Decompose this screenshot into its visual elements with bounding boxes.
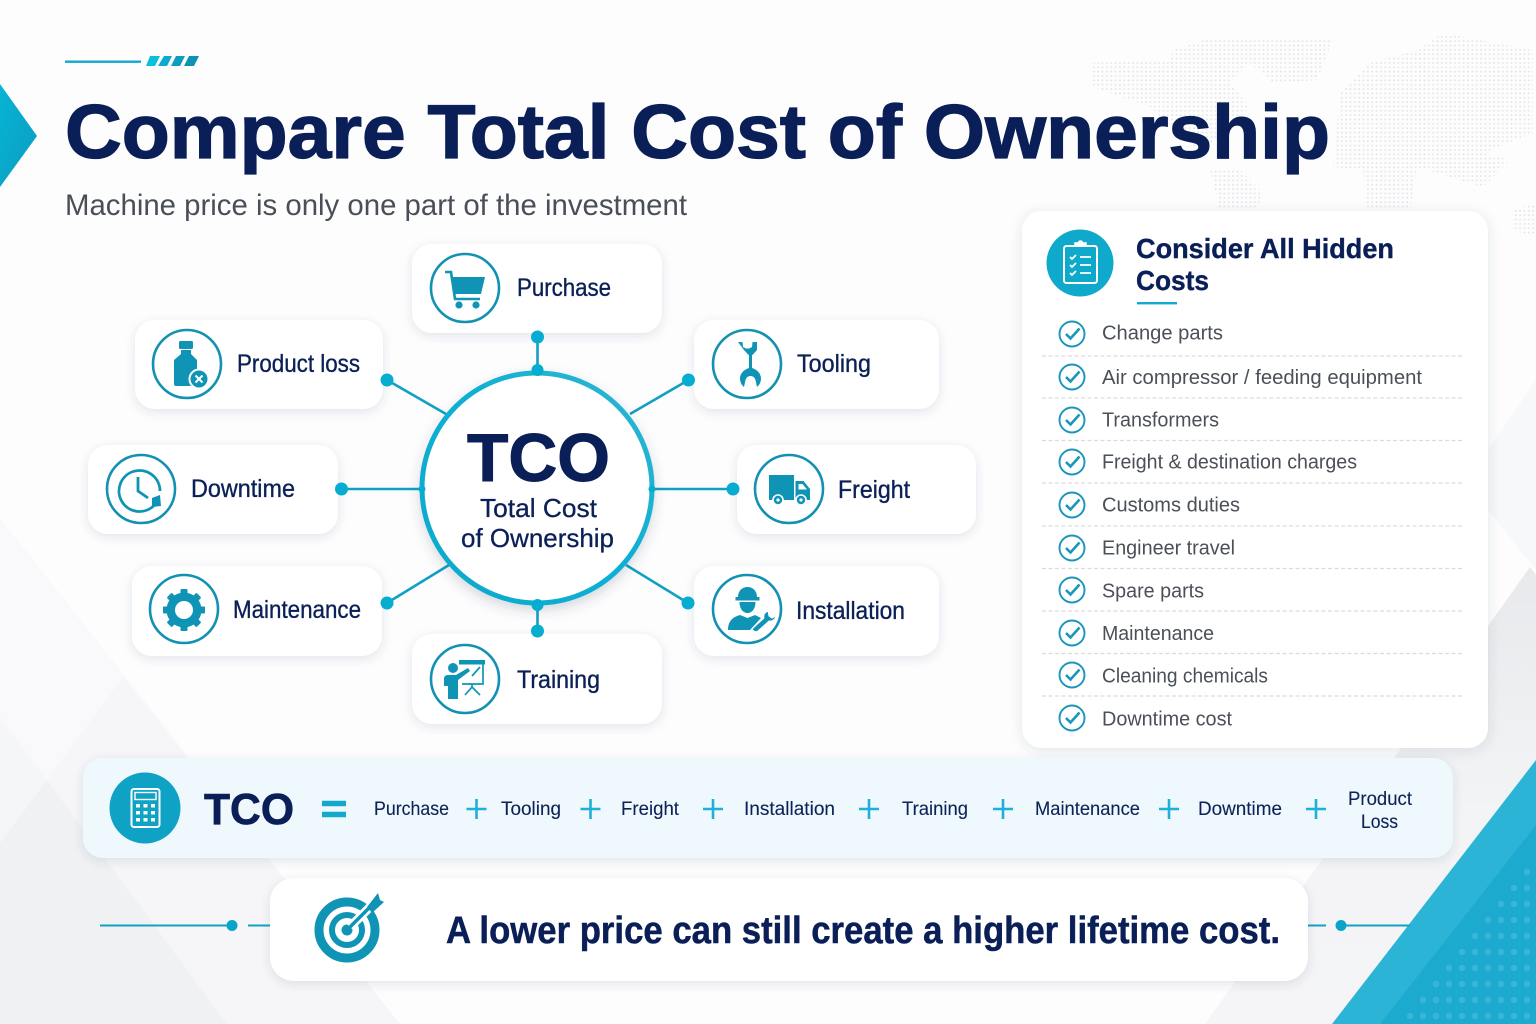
panel heading: Consider All Hidden [1136,233,1394,264]
icon: bottle with x [174,341,208,388]
formula terms: Maintenance [1035,798,1140,820]
formula terms [374,788,1413,833]
checklist rows: Customs duties [1102,494,1240,516]
card: Tooling [694,320,939,409]
icon: worker with wrench [728,587,776,632]
formula terms: Product [1348,788,1413,810]
subtitle: Machine price is only one part of the investment [65,189,688,222]
card: Freight: Freight [838,476,910,504]
formula bar [83,758,1453,858]
takeaway text: A lower price can still create a higher lifetime cost. [446,910,1280,952]
formula terms: Loss [1361,811,1398,833]
teal corner triangle [1332,760,1536,1024]
world map dotted background [1090,33,1536,237]
card: Installation: Installation [796,597,905,625]
formula terms: Tooling [501,798,561,820]
formula terms: Downtime [1198,798,1282,820]
central TCO circle: of Ownership [461,523,614,553]
takeaway banner [270,878,1308,981]
card: Product loss: Product loss [237,350,360,378]
panel: hidden costs checklist [1022,211,1488,748]
card: Training [412,634,662,724]
checklist rows: Maintenance [1102,622,1214,645]
card: Purchase: Purchase [517,274,611,302]
checklist rows: Spare parts [1102,580,1204,602]
checklist rows: Change parts [1102,322,1223,344]
checklist rows [1042,322,1464,730]
card: Purchase [412,244,662,333]
panel heading [1136,233,1394,304]
formula terms: Purchase [374,798,449,820]
takeaway side connectors [100,920,1410,931]
icon: truck [769,475,810,505]
card: Maintenance [132,566,382,656]
card: Maintenance: Maintenance [233,596,361,624]
formula terms: Training [902,798,968,820]
icon: calculator [110,772,180,844]
icon: wrench [738,342,761,387]
checklist rows: Downtime cost [1102,708,1232,730]
icon: clock [119,471,161,512]
card: Downtime: Downtime [191,475,295,503]
checklist rows: Freight & destination charges [1102,450,1357,474]
card: Downtime [88,445,338,534]
card: Freight [737,445,976,534]
title: Compare Total Cost of Ownership [65,90,1330,175]
icon: clipboard [1046,230,1114,296]
header accent line [65,56,199,66]
checklist rows: Transformers [1102,408,1219,432]
panel heading: Costs [1136,265,1209,296]
card: Tooling: Tooling [797,350,871,378]
checklist rows: Cleaning chemicals [1102,664,1268,688]
formula label: TCO [204,785,294,834]
card: Product loss [135,320,383,409]
card: Installation [694,566,939,656]
icon: target with arrow [319,893,384,958]
central TCO circle: TCO [467,420,610,496]
checklist rows: Air compressor / feeding equipment [1102,366,1422,389]
formula terms: Freight [621,798,680,820]
formula terms: Installation [744,798,835,820]
central TCO circle [418,364,656,611]
icon: shopping cart [445,272,485,309]
equals sign [322,804,346,814]
central TCO circle: Total Cost [480,493,598,523]
icon: trainer at board [444,660,485,699]
card: Training: Training [517,666,600,694]
connector lines and nodes [335,330,740,638]
icon: gear [163,589,205,631]
left arrow accent [0,84,37,187]
checklist rows: Engineer travel [1102,536,1235,560]
